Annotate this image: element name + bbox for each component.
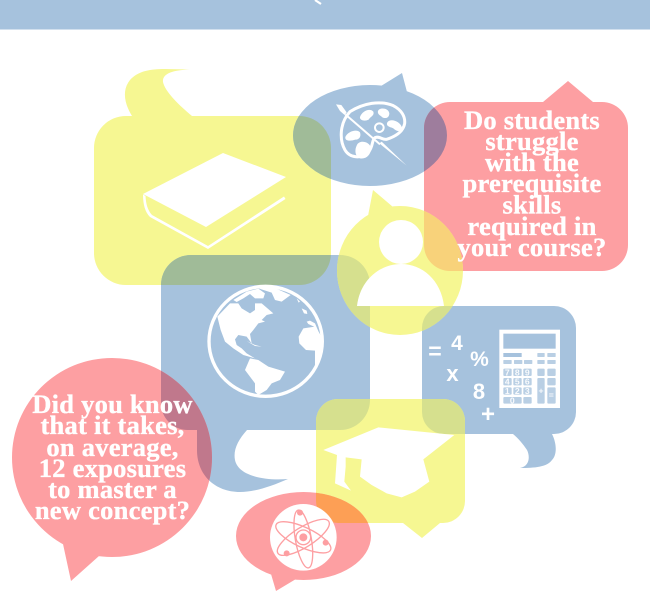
question text: prerequisites: your course?: [458, 232, 606, 262]
question text: did you know: Did you know: [32, 389, 193, 419]
icon: math symbols: [428, 332, 495, 428]
icon: calculator: 5: [515, 377, 520, 387]
question text: did you know: [32, 389, 193, 525]
question text: prerequisites: with the: [485, 147, 579, 177]
bubble: person (yellow): [337, 190, 463, 335]
icon: math symbols: 8: [473, 379, 485, 404]
icon: graduation cap: [323, 427, 454, 497]
bubble: question about prerequisites (red): [424, 81, 628, 271]
question text: did you know: that it takes,: [40, 410, 185, 440]
bubble: atom (red): [236, 492, 371, 591]
icon: calculator: [499, 330, 560, 408]
icon: artist palette: [336, 103, 407, 166]
bubble: did you know (red): [12, 358, 212, 581]
icon: calculator: 3: [525, 386, 530, 396]
icon: math symbols: 4: [451, 332, 463, 355]
bubble: book (yellow): [94, 69, 331, 285]
icon: calculator: 8: [515, 367, 520, 377]
question text: prerequisites: required in: [467, 211, 597, 241]
bubble: graduation cap (yellow): [316, 399, 465, 538]
icon: math symbols: =: [428, 338, 442, 364]
icon: calculator: 7: [505, 367, 510, 377]
icon: calculator: +: [538, 386, 544, 396]
question text: did you know: new concept?: [35, 495, 190, 525]
icon: calculator: 4: [505, 377, 510, 387]
question text: did you know: to master a: [48, 474, 177, 504]
icon: calculator: 2: [515, 386, 520, 396]
icon: globe: [209, 286, 323, 396]
icon: calculator: 1: [505, 386, 510, 396]
header band: [0, 0, 650, 30]
icon: book: [143, 153, 286, 249]
question text: prerequisites: skills: [503, 190, 561, 220]
icon: math symbols: %: [470, 348, 489, 371]
question text: did you know: on average,: [46, 432, 179, 462]
icon: atom: [270, 504, 337, 571]
icon: calculator: 6: [525, 377, 530, 387]
question text: prerequisites: struggle: [485, 126, 579, 156]
question text: prerequisites: [458, 105, 606, 262]
bubble: globe (blue): [161, 255, 370, 492]
icon: math symbols: +: [481, 401, 495, 428]
bubble: palette (blue): [293, 73, 447, 186]
icon: calculator: 0: [510, 395, 515, 405]
icon: person: [357, 220, 444, 306]
icon: calculator: =: [549, 390, 554, 400]
bubble: calculator (blue): [422, 306, 576, 468]
question text: prerequisites: Do students: [464, 105, 600, 135]
question text: did you know: 12 exposures: [39, 453, 186, 483]
icon: calculator: 9: [525, 367, 530, 377]
icon: math symbols: x: [446, 361, 459, 386]
bubble overlap tints: [154, 102, 465, 556]
question text: prerequisites: prerequisite: [463, 168, 601, 198]
